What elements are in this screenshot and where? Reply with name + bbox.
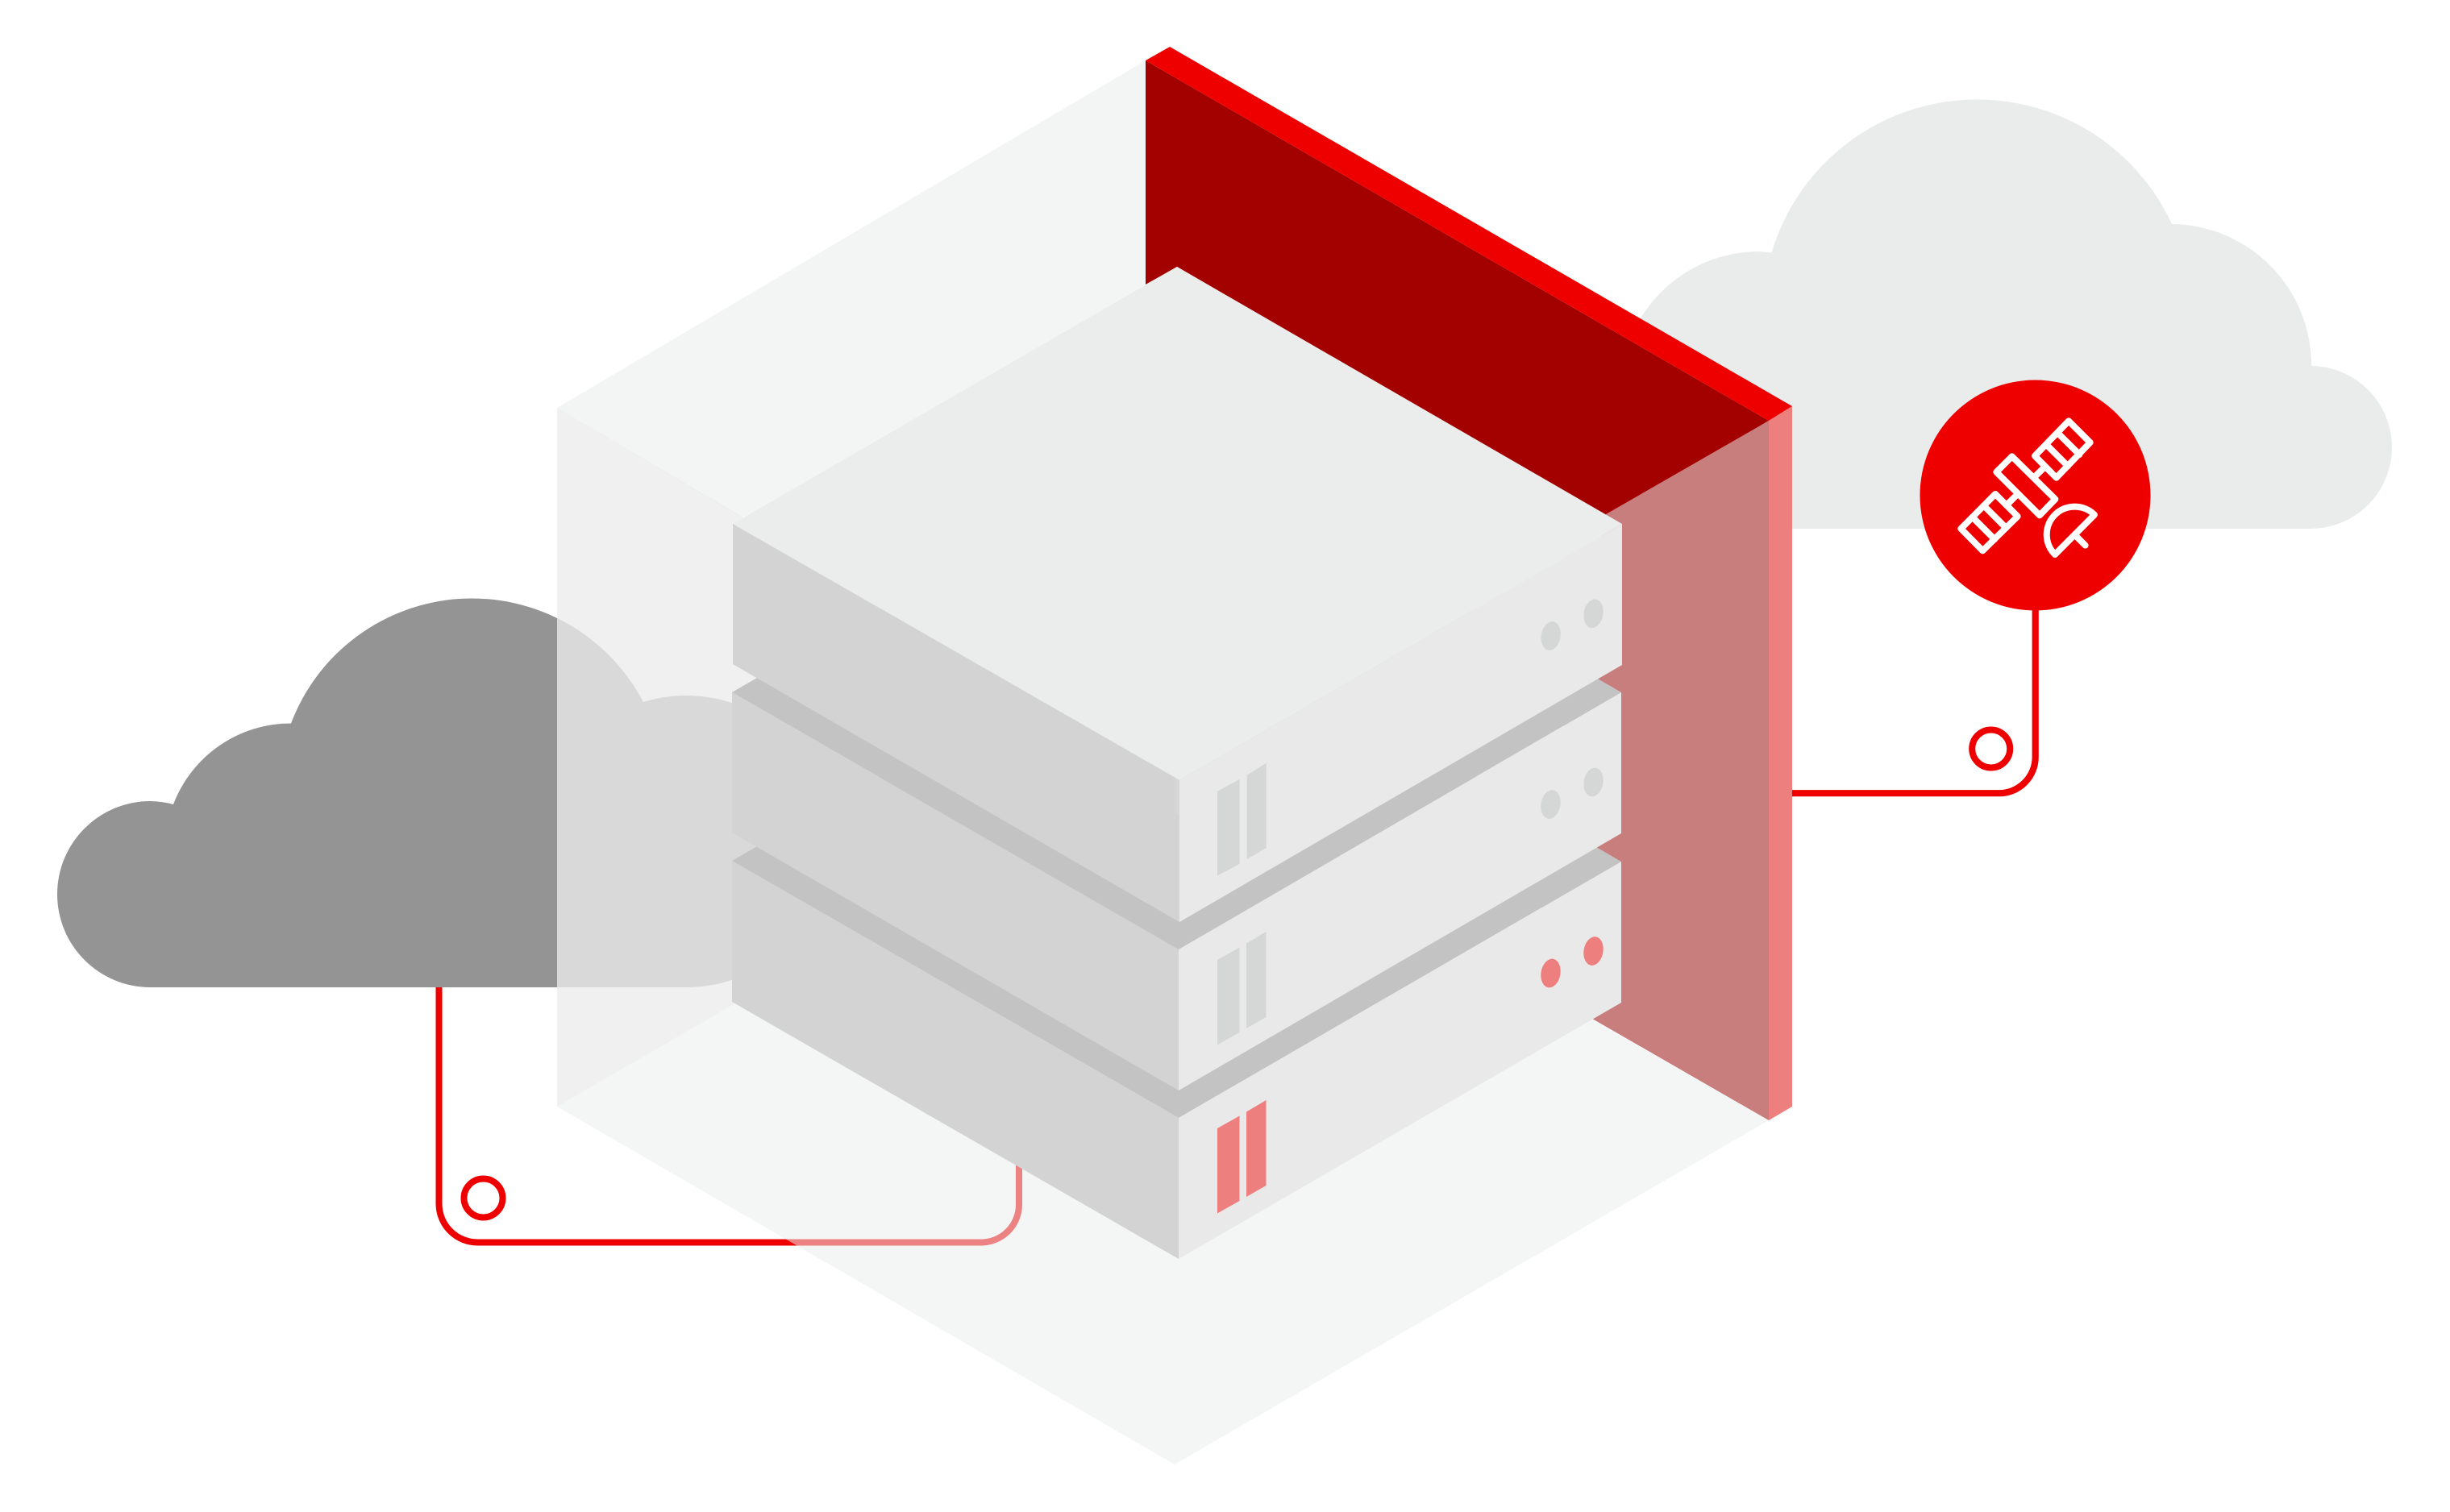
top face: [732, 435, 1621, 949]
cloud: left dark cloud: [57, 598, 832, 987]
room: back left wall: [557, 60, 1146, 524]
cloud: right light cloud: [1620, 99, 2392, 529]
left face corner sliver: [1175, 777, 1179, 816]
wall edge: pink column: [1769, 406, 1792, 1120]
connector node: right ring: [1972, 730, 2010, 767]
right face: [1179, 692, 1621, 1090]
connector node: left ring: [464, 1178, 503, 1217]
top face: [733, 267, 1622, 780]
satellite: struts: [2007, 466, 2045, 505]
top face: [732, 604, 1621, 1118]
badge: red circle: [1920, 380, 2151, 611]
satellite: upper solar panel: [2035, 421, 2090, 478]
connector: left cloud to server line: [439, 987, 1019, 1243]
satellite badge: [1920, 380, 2151, 611]
connector: satellite to server line: [1774, 604, 2036, 793]
left face: [733, 524, 1179, 922]
drive slots: grey: [1217, 932, 1266, 1045]
icon: satellite: [1961, 421, 2094, 555]
right face: [1179, 862, 1621, 1259]
left face: [732, 861, 1179, 1259]
server unit 3: bottom: [732, 604, 1621, 1259]
wall face: dark red: [1146, 60, 1769, 516]
satellite: body: [1996, 456, 2055, 515]
wall face: muted pink interior: [1532, 421, 1769, 1120]
satellite: lower solar panel: [1961, 494, 2018, 550]
right face: [1179, 524, 1622, 922]
satellite: dish: [2047, 507, 2094, 555]
status lights: red: [1539, 935, 1605, 989]
server unit 2: middle: [732, 435, 1621, 1090]
wall edge: bright red top band: [1146, 47, 1792, 421]
status lights: grey: [1539, 597, 1605, 652]
server unit 1: top: [733, 267, 1622, 922]
status lights: grey: [1539, 766, 1605, 820]
drive slots: grey: [1217, 763, 1267, 876]
room: translucent floor: [557, 766, 1769, 1464]
left face: [732, 692, 1179, 1090]
room: translucent left wall: [557, 408, 1146, 1107]
server stack: [732, 267, 1622, 1259]
drive slots: red: [1217, 1100, 1266, 1214]
room: back right red wall: [1146, 47, 1792, 1120]
